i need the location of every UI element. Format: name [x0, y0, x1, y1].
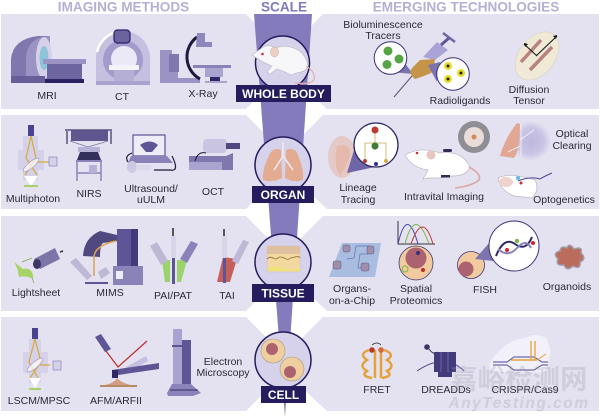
label: electron microscopy: Electron [204, 356, 242, 368]
label: ultrasound / uULM: Ultrasound/ [124, 183, 178, 195]
label: diffusion tensor: Tensor [513, 95, 545, 107]
label: multiphoton: Multiphoton [6, 193, 60, 205]
label: whole body: WHOLE BODY [242, 87, 325, 101]
watermark: AnyTesting.com [448, 395, 590, 412]
watermark [448, 365, 590, 412]
label: MIMS: MIMS [96, 287, 124, 299]
label: DREADDs: DREADDs [421, 384, 471, 396]
circle: tissue [255, 234, 311, 290]
label: TAI: TAI [219, 290, 235, 302]
label: organ [252, 186, 314, 203]
label: FRET: FRET [363, 384, 391, 396]
label: X-Ray: X-Ray [188, 88, 218, 100]
icon: radioligands bubble [428, 58, 469, 90]
icon: PAI/PAT [150, 228, 198, 284]
icon: NIRS [65, 130, 112, 181]
label: LSCM/MPSC: LSCM/MPSC [8, 395, 71, 407]
label: organ: ORGAN [261, 188, 305, 202]
icon: organs-on-a-chip [329, 243, 381, 277]
chart: spectral curves [398, 221, 435, 244]
icon: MIMS [70, 229, 143, 285]
icon: ultrasound [127, 135, 176, 173]
label: lightsheet: Lightsheet [12, 287, 60, 299]
label: radioligands: Radioligands [430, 95, 490, 107]
circle: cell [255, 332, 311, 388]
label: ultrasound / uULM: uULM [137, 194, 165, 206]
icon: AFM/ARFII [95, 334, 159, 387]
icon: TAI [217, 229, 249, 283]
label: tissue [252, 284, 314, 302]
label: MRI: MRI [37, 90, 57, 102]
label: lineage tracing: Tracing [341, 194, 375, 206]
icon: MRI [11, 36, 86, 83]
label: CT: CT [115, 91, 130, 103]
icon: intravital imaging mouse [405, 121, 490, 188]
label: AFM/ARFII: AFM/ARFII [90, 395, 142, 407]
label: spatial proteomics: Spatial [400, 283, 432, 295]
label: optogenetics: Optogenetics [533, 194, 595, 206]
label: intravital imaging: Intravital Imaging [404, 191, 484, 203]
label: lineage tracing: Lineage [339, 182, 377, 194]
icon: LSCM/MPSC [23, 328, 61, 390]
icon: FISH [458, 221, 539, 278]
label: organs-on-a-chip: Organs- [333, 283, 371, 295]
icon: optical clearing lung [500, 121, 551, 161]
icon: syringe [394, 33, 455, 97]
circle: whole body [252, 36, 314, 90]
watermark: 嘉峪检测网 [450, 365, 588, 395]
label: OCT: OCT [202, 186, 225, 198]
label: organs-on-a-chip: on-a-Chip [329, 295, 375, 307]
icon: multiphoton [18, 125, 57, 187]
label: optical clearing: Clearing [552, 140, 592, 152]
label: electron microscopy: Microscopy [196, 367, 250, 379]
label: optical clearing: Optical [556, 128, 588, 140]
icon: lineage tracing [328, 123, 398, 178]
label: PAI/PAT: PAI/PAT [154, 290, 193, 302]
scale funnel [254, 14, 312, 417]
icon: DREADDs [417, 344, 464, 377]
label: spatial proteomics: Proteomics [390, 295, 442, 307]
icon: diffusion tensor [506, 24, 568, 88]
label: CRISPR/Cas9: CRISPR/Cas9 [491, 384, 559, 396]
icon: electron microscope [167, 329, 201, 396]
label: cell: CELL [268, 388, 299, 402]
label: bioluminescence tracers: Tracers [365, 30, 401, 42]
label: cell [261, 386, 306, 403]
icon: OCT [189, 139, 240, 170]
circle: organ [255, 137, 311, 193]
label: FISH: FISH [473, 284, 497, 296]
icon: X-Ray [160, 33, 231, 83]
label: tissue: TISSUE [261, 286, 305, 300]
label: bioluminescence tracers: Bioluminescence [343, 19, 423, 31]
icon: lightsheet [14, 248, 63, 283]
icon: CRISPR/Cas9 [490, 335, 550, 373]
label: organoids: Organoids [543, 281, 591, 293]
label: diffusion tensor: Diffusion [509, 84, 549, 96]
icon: CT [96, 30, 150, 85]
label: NIRS: NIRS [76, 188, 102, 200]
icon: FRET [362, 343, 392, 378]
icon: bioluminescence tracers bubble [374, 42, 413, 74]
icon: spatial proteomics cell [399, 246, 433, 280]
icon: optogenetics mouse [498, 173, 552, 198]
icon: organoid [555, 245, 584, 269]
